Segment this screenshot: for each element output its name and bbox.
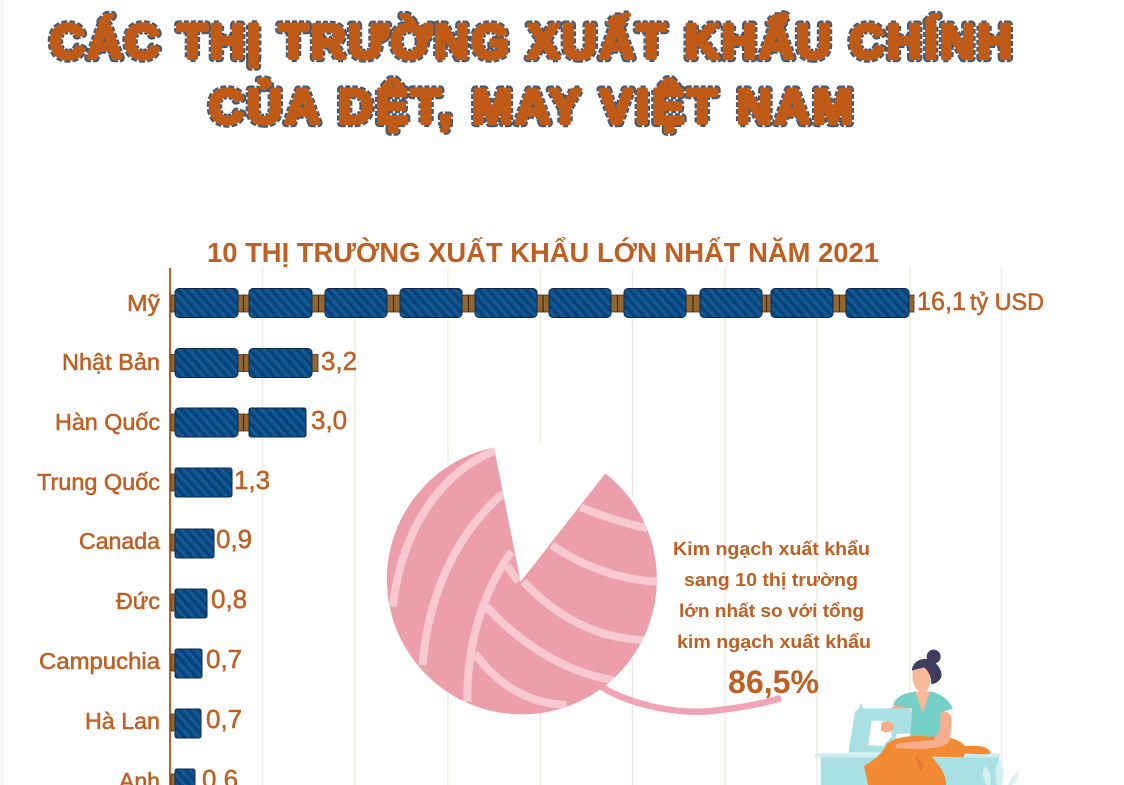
bar: Canada: 0,9 bbox=[216, 524, 252, 554]
bar: Trung Quốc: 1,3 bbox=[234, 465, 270, 495]
title: CỦA DỆT, MAY VIỆT NAM bbox=[209, 79, 853, 134]
chart heading: 10 THỊ TRƯỜNG XUẤT KHẨU LỚN NHẤT NĂM 2021 bbox=[207, 237, 879, 268]
bar: Hàn Quốc: 3,0 bbox=[311, 405, 347, 435]
bar: Campuchia: Campuchia bbox=[39, 648, 160, 674]
icon: seamstress bbox=[864, 650, 991, 785]
bar: Nhật Bản bbox=[62, 346, 357, 378]
yarn ball pie chart bbox=[385, 441, 781, 715]
callout: share of exports: sang 10 thị trường bbox=[684, 570, 858, 590]
bar: Mỹ bbox=[127, 286, 1044, 318]
bar: Nhật Bản: 3,2 bbox=[321, 346, 357, 376]
title: CÁC THỊ TRƯỜNG XUẤT KHẨU CHÍNH bbox=[50, 14, 1012, 69]
bar: Đức: Đức bbox=[116, 588, 160, 614]
bar: Anh bbox=[119, 764, 238, 785]
bar: Hà Lan: 0,7 bbox=[206, 704, 242, 734]
title: CÁC THỊ TRƯỜNG XUẤT KHẨU CHÍNH bbox=[50, 14, 1012, 69]
bar: Mỹ: tỷ USD bbox=[970, 289, 1044, 316]
icon: plant bbox=[983, 759, 1018, 785]
illustration: seamstress at sewing machine bbox=[815, 650, 1018, 785]
title bbox=[50, 14, 1012, 134]
bar: Đức bbox=[116, 584, 247, 618]
callout: share of exports: Kim ngạch xuất khẩu bbox=[673, 539, 870, 559]
bar: Campuchia bbox=[39, 644, 242, 678]
icon: table bbox=[815, 753, 1000, 785]
bar: Canada: Canada bbox=[79, 528, 160, 554]
callout: share of exports bbox=[673, 539, 871, 700]
bar: Hàn Quốc bbox=[55, 405, 347, 437]
bar: Mỹ: 16,1 bbox=[917, 286, 966, 316]
bar: Hàn Quốc: Hàn Quốc bbox=[55, 409, 160, 435]
bar: Campuchia: 0,7 bbox=[206, 644, 242, 674]
callout: share of exports: kim ngạch xuất khẩu bbox=[677, 632, 871, 652]
bar: Hà Lan bbox=[85, 704, 242, 738]
bar: Canada bbox=[79, 524, 252, 558]
bar chart bbox=[37, 268, 1044, 785]
icon: sewing machine bbox=[848, 703, 914, 753]
bar: Trung Quốc bbox=[37, 465, 270, 497]
callout: share of exports: lớn nhất so với tổng bbox=[679, 601, 864, 621]
bar: Mỹ: Mỹ bbox=[127, 290, 161, 316]
bar: Hà Lan: Hà Lan bbox=[85, 708, 160, 734]
title: CỦA DỆT, MAY VIỆT NAM bbox=[209, 79, 853, 134]
callout: share of exports: 86,5% bbox=[728, 664, 819, 700]
bar: Trung Quốc: Trung Quốc bbox=[37, 469, 160, 495]
bar: Đức: 0,8 bbox=[211, 584, 247, 614]
bar: Nhật Bản: Nhật Bản bbox=[62, 349, 160, 375]
